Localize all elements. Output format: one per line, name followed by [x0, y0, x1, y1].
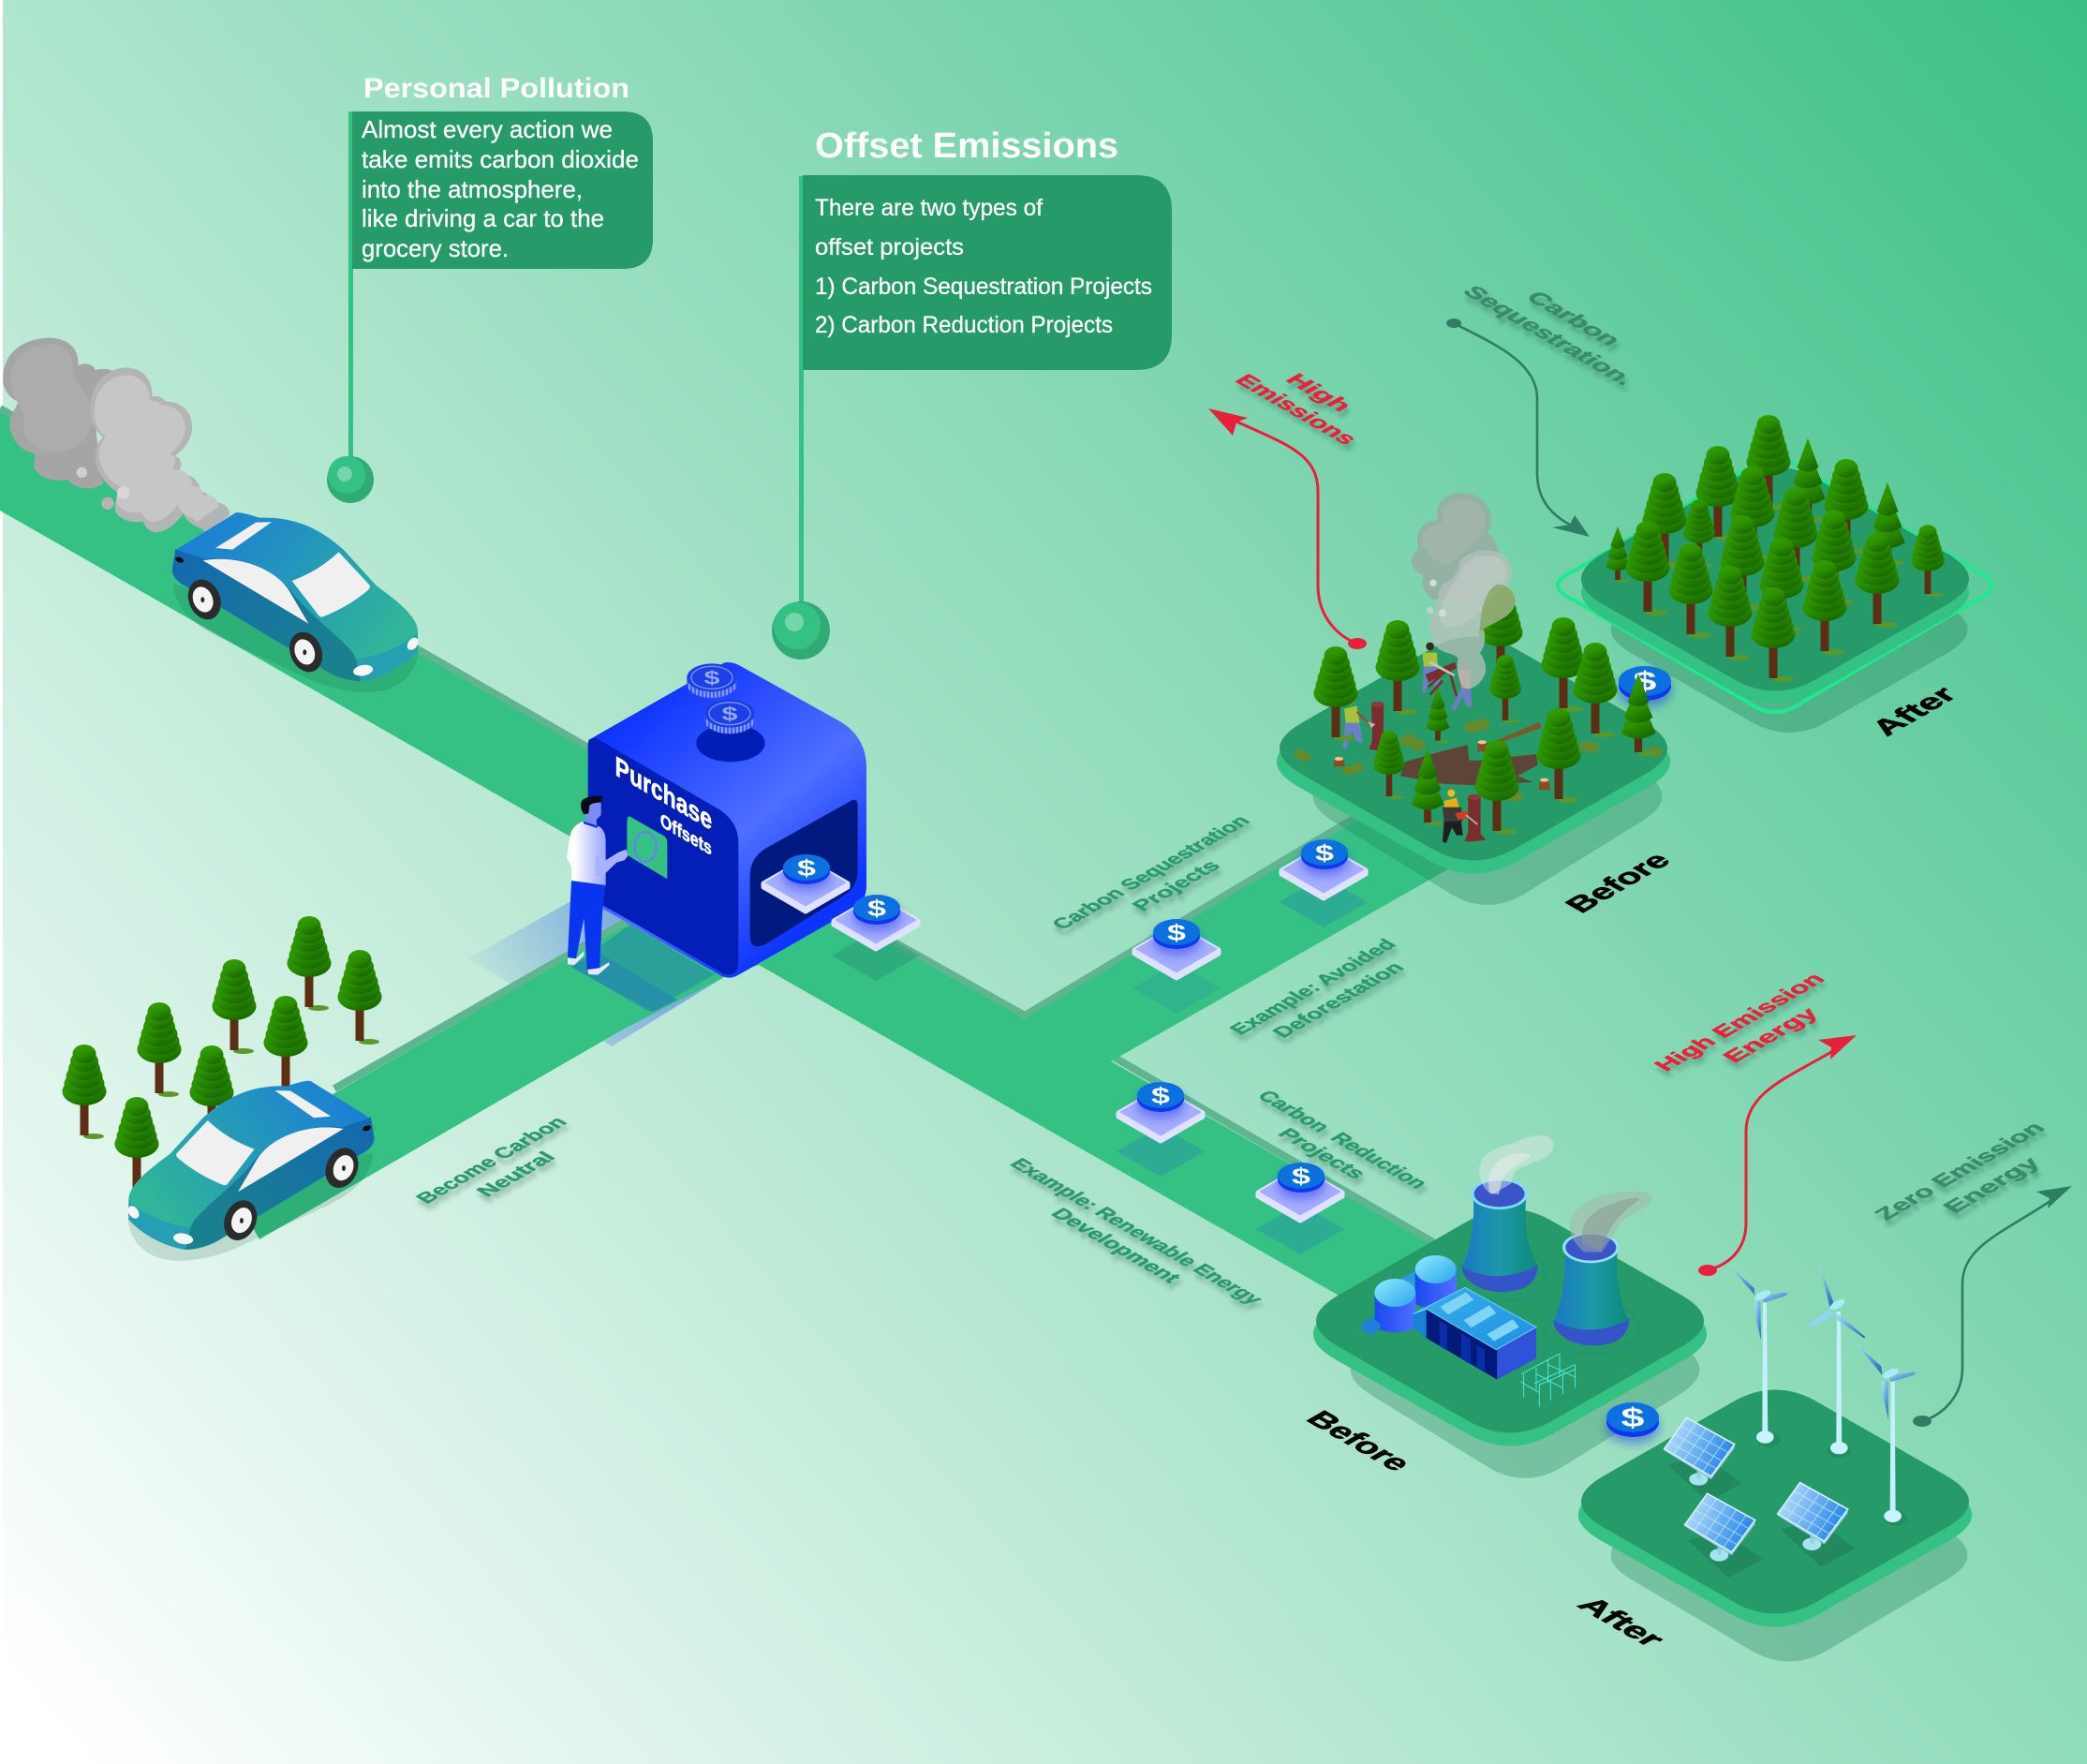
- tile with coin: reduction path 1: $: [1151, 1083, 1170, 1108]
- bushes: [1294, 719, 1663, 801]
- tile with coin: sequestration path 2: $: [1315, 840, 1334, 866]
- label: carbon sequestration: Carbon: [1520, 288, 1626, 349]
- cooling tower 2: [1545, 1192, 1652, 1355]
- label: carbon reduction projects: Projects: [1273, 1125, 1371, 1182]
- coin dropping in slot: [704, 700, 755, 734]
- coin dropping in slot: $: [721, 703, 738, 725]
- deforestation scene: [1294, 643, 1663, 843]
- output window: [750, 800, 858, 946]
- light beam under machine: [468, 885, 724, 1046]
- label: zero emission energy: Zero Emission: [1869, 1119, 2050, 1223]
- platform: power plant before: [1313, 1135, 1707, 1478]
- stumps: [1333, 740, 1550, 790]
- platform: forest after: [1558, 415, 1992, 733]
- power plant: [1362, 1135, 1652, 1407]
- forest trees before: [1313, 586, 1656, 835]
- forest trees: [1606, 415, 1945, 682]
- tile with coin inside machine: $: [797, 855, 816, 881]
- tile with coin: sequestration path 1: $: [1167, 920, 1186, 945]
- label: carbon sequestration projects: Carbon Sequestration: [1046, 812, 1255, 933]
- felled log: [1497, 722, 1542, 743]
- floating coin between power platforms: [1606, 1402, 1659, 1437]
- label: example avoided deforestation: Deforestation: [1267, 958, 1409, 1041]
- floating coin between forest platforms: [1619, 666, 1671, 701]
- callout: offset emissions: offset projects: [815, 234, 964, 260]
- label: high emissions: High: [1280, 370, 1357, 415]
- machine front face: [588, 738, 738, 975]
- callout: offset emissions: Offset Emissions: [815, 126, 1118, 166]
- pin: personal pollution: [327, 111, 374, 503]
- arrow: zero emission energy: [1913, 1186, 2072, 1427]
- tile with coin inside machine: [763, 854, 848, 912]
- electrical grid: [1520, 1354, 1576, 1407]
- arrow: high emission energy red: [1698, 1035, 1857, 1276]
- callout: offset emissions: [803, 126, 1172, 370]
- floating coin between forest platforms: $: [1634, 666, 1657, 696]
- callout: personal pollution: into the atmosphere,: [362, 175, 583, 203]
- smoke above forest: [1412, 493, 1516, 689]
- callout: personal pollution: [352, 73, 653, 269]
- label: high emissions: Emissions: [1229, 371, 1363, 449]
- logger with chainsaw: [1443, 790, 1477, 843]
- callout: personal pollution: Personal Pollution: [363, 73, 629, 104]
- logger with axe: [1342, 697, 1375, 749]
- tile with coin: reduction path 2: [1258, 1163, 1342, 1221]
- callout: offset emissions: 1) Carbon Sequestration Projects: [815, 274, 1152, 300]
- purchase offsets machine: [588, 662, 866, 978]
- trees near finish: [62, 916, 382, 1192]
- wind turbine 2: [1809, 1265, 1866, 1458]
- pin: offset emissions: [772, 176, 830, 660]
- coin on machine: $: [703, 667, 720, 689]
- storage tanks: [1362, 1255, 1457, 1335]
- label: before forest: Before: [1558, 848, 1678, 917]
- solar panel 3: [1778, 1483, 1856, 1567]
- label: carbon sequestration: Sequestration.: [1457, 282, 1641, 389]
- tile shadows on road: [832, 877, 1368, 1254]
- tile with coin: sequestration path 1: [1134, 919, 1219, 978]
- crater: [1400, 745, 1538, 785]
- tile with coin: reduction path 1: [1118, 1082, 1203, 1141]
- arrow: high emissions red: [1208, 408, 1367, 649]
- dead trunks: [1369, 704, 1386, 751]
- road network: [0, 408, 1499, 1330]
- conifer behind loggers: [1426, 687, 1450, 743]
- arrow: carbon sequestration: [1446, 319, 1590, 537]
- wind turbine 3: [1854, 1342, 1916, 1526]
- callout: offset emissions: There are two types of: [815, 195, 1043, 221]
- car carbon neutral: [126, 1081, 374, 1261]
- label: before power: Before: [1299, 1406, 1419, 1475]
- payment screen: [627, 816, 667, 879]
- label: become carbon neutral: Neutral: [471, 1149, 560, 1200]
- tile with coin: reduction path 2: $: [1292, 1164, 1310, 1189]
- coin slot: [696, 724, 765, 762]
- label: example renewable energy development: Example: Renewable Energy: [1005, 1155, 1269, 1308]
- platform: forest before: [1277, 586, 1670, 905]
- car with exhaust: [172, 512, 421, 692]
- label: example avoided deforestation: Example: Avoided: [1224, 936, 1401, 1038]
- callout: offset emissions: 2) Carbon Reduction Projects: [815, 312, 1113, 338]
- solar panel 1: [1665, 1417, 1742, 1502]
- callout: personal pollution: like driving a car to the: [362, 204, 604, 232]
- floating coin between power platforms: $: [1621, 1402, 1645, 1432]
- machine label: Purchase: [615, 750, 712, 837]
- callout: personal pollution: grocery store.: [362, 234, 509, 262]
- platform: renewable after: [1578, 1263, 1972, 1662]
- machine label: Offsets: [660, 809, 712, 860]
- label: carbon sequestration projects: Projects: [1127, 857, 1225, 914]
- wind turbine 1: [1726, 1263, 1787, 1447]
- smoke from first car: [3, 338, 229, 532]
- label: become carbon neutral: Become Carbon: [410, 1113, 572, 1207]
- callout: personal pollution: take emits carbon dioxide: [362, 145, 639, 173]
- factory building: [1413, 1287, 1536, 1380]
- label: high emission energy: Energy: [1717, 1004, 1825, 1066]
- solar panel 2: [1685, 1493, 1763, 1578]
- label: example renewable energy development: Development: [1046, 1205, 1187, 1286]
- tile with coin: sequestration path 2: [1281, 839, 1366, 898]
- label: carbon reduction projects: Carbon Reduction: [1252, 1087, 1433, 1192]
- tile with coin after machine: [834, 895, 918, 949]
- renewable equipment: [1665, 1263, 1916, 1578]
- label: high emission energy: High Emission: [1649, 970, 1830, 1075]
- person at machine: [567, 795, 629, 975]
- label: after forest: After: [1863, 682, 1964, 740]
- coin on machine: [687, 663, 737, 698]
- callout: personal pollution: Almost every action we: [362, 115, 613, 143]
- tile with coin after machine: $: [867, 896, 886, 921]
- label: zero emission energy: Energy: [1937, 1153, 2047, 1217]
- loggers with saw: [1422, 643, 1473, 710]
- machine body: [588, 662, 866, 978]
- cooling tower 1: [1458, 1135, 1553, 1300]
- label: after renewable: After: [1570, 1592, 1673, 1652]
- person and machine shadow on road: [571, 925, 715, 1012]
